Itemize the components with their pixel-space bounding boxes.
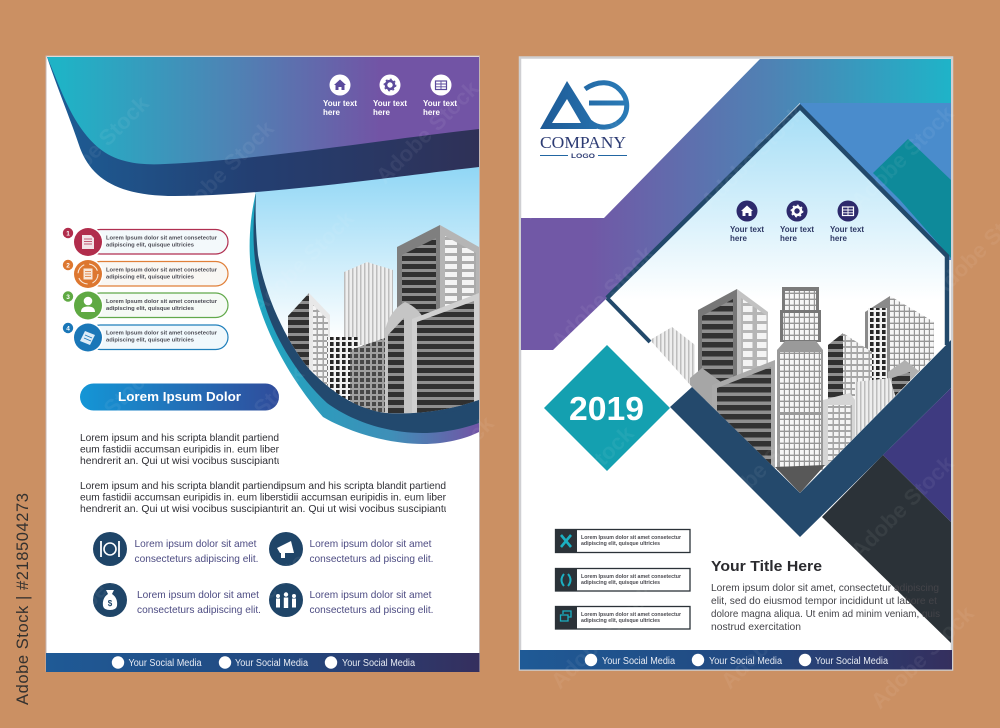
feature: dining: consecteturs adipiscing elit. (134, 554, 258, 565)
item 3: adipiscing elit, quisque ultricies (106, 306, 194, 312)
year diamond (544, 345, 670, 471)
icon: home (330, 74, 350, 96)
watermarks: Adobe Stock (706, 410, 819, 524)
icon: calendar (430, 74, 452, 96)
sky (253, 160, 479, 413)
curved crescent teal (250, 160, 479, 444)
footer bar left: Your Social Media (128, 658, 202, 669)
watermarks: Adobe Stock (866, 600, 979, 714)
icon: gear (380, 74, 400, 96)
watermarks: Adobe Stock (46, 530, 159, 644)
city skyline left (288, 225, 479, 422)
paragraph column 1: Lorem ipsum and his scripta blandit partiend (80, 481, 279, 492)
feature: megaphone (269, 532, 434, 566)
caption 1: here (323, 108, 340, 117)
dark slate shape (822, 455, 951, 643)
geometric cover shapes (521, 59, 951, 643)
blue corner panel (800, 103, 951, 260)
item 4: adipiscing elit, quisque ultricies (106, 338, 194, 344)
paragraph column 2: eum fastidii accumsan euripidis in. eum liber (247, 492, 447, 504)
logo mark reversed E (585, 83, 627, 127)
numbered list (63, 226, 228, 353)
header icons (323, 74, 457, 117)
item 2: adipiscing elit, quisque ultricies (106, 274, 194, 280)
watermarks: Adobe Stock (386, 410, 499, 524)
curved crescent navy (254, 160, 479, 433)
page sheet (46, 56, 480, 671)
box 2: adipiscing elit, quisque ultricies (581, 580, 660, 586)
paragraph column 1: eum fastidii accumsan euripidis in. eum liber (80, 444, 280, 456)
caption 3: Your text (423, 99, 457, 108)
left brochure page (46, 56, 480, 672)
watermarks: Adobe Stock (166, 115, 279, 229)
footer bar right: Your Social Media (602, 656, 675, 667)
box 3: Lorem Ipsum dolor sit amet consetectur (581, 612, 681, 618)
heading button: Lorem Ipsum Dolor (118, 389, 241, 404)
frame lower left (607, 298, 650, 342)
watermarks: Adobe Stock (216, 530, 329, 644)
purple triangle (883, 388, 951, 522)
gradient header (47, 57, 479, 164)
sky and city panel (250, 160, 479, 444)
feature: megaphone: consecteturs ad piscing elit. (310, 554, 434, 565)
body text: Lorem ipsum dolor sit amet, consectetur adipiscing (711, 582, 939, 594)
box 2 (555, 568, 690, 592)
item 1: adipiscing elit, quisque ultricies (106, 242, 194, 248)
item 4: 4 (66, 326, 70, 332)
watermarks: Adobe Stock (546, 240, 659, 354)
footer bar left (46, 653, 480, 672)
caption 3: Your text (830, 225, 864, 234)
box 1: Lorem Ipsum dolor sit amet consetectur (581, 535, 681, 541)
watermarks: Adobe Stock (696, 100, 809, 214)
body text: dolore magna aliqua. Ut enim ad minim veniam, quis (711, 608, 940, 620)
logo tagline: LOGO (571, 154, 595, 160)
item 4: Lorem Ipsum dolor sit amet consetectur (106, 330, 218, 336)
heading button (80, 384, 279, 410)
feature: people (269, 583, 434, 617)
city skyline right (650, 287, 934, 493)
caption 2: Your text (780, 225, 814, 234)
item 3: Lorem Ipsum dolor sit amet consetectur (106, 299, 218, 305)
navy shadow below crescent edge (308, 370, 479, 417)
diamond frame (607, 107, 947, 345)
footer bar right: Your Social Media (815, 656, 888, 667)
body text (711, 582, 940, 633)
caption 1: here (730, 234, 747, 243)
watermarks: Adobe Stock (716, 580, 829, 694)
stock id side label: Adobe Stock | #218504273 (14, 493, 32, 705)
paragraph column 1: hendrerit an. Qui ut wisi vocibus suscipiantur (80, 456, 287, 467)
paragraph column 1: hendrerit an. Qui ut wisi vocibus suscipiantur (80, 504, 287, 515)
feature: people: consecteturs ad piscing elit. (310, 605, 434, 616)
watermarks: Adobe Stock (516, 110, 629, 224)
caption 1: Your text (323, 99, 357, 108)
logo mark triangle (540, 81, 597, 129)
watermarks: Adobe Stock (846, 100, 959, 214)
navy swoosh (47, 57, 479, 196)
box 1 (555, 529, 690, 553)
caption 2: here (373, 108, 390, 117)
item 1 (63, 226, 228, 258)
feature: money bag (93, 583, 261, 617)
footer bar right (520, 650, 952, 670)
watermarks: Adobe Stock (41, 90, 154, 204)
header curved band (47, 57, 479, 196)
box 3: adipiscing elit, quisque ultricies (581, 618, 660, 624)
paragraph column 2: Lorem ipsum and his scripta blandit partiend (247, 481, 446, 492)
item 1: 1 (66, 230, 70, 238)
body text: nostrud exercitation (711, 621, 801, 633)
feature: dining (93, 532, 258, 566)
service boxes (555, 529, 690, 630)
body paragraphs (80, 433, 454, 515)
caption 2: here (780, 234, 797, 243)
purple diagonal band (521, 59, 951, 350)
logo (540, 81, 627, 160)
caption 3: here (830, 234, 847, 243)
paragraph column 1: Lorem ipsum and his scripta blandit partiend (80, 433, 279, 444)
watermarks: Adobe Stock (196, 360, 309, 474)
caption 2: Your text (373, 99, 407, 108)
watermarks: Adobe Stock (46, 360, 159, 474)
item 4 (63, 322, 228, 353)
watermarks: Adobe Stock (371, 75, 484, 189)
feature icons grid (93, 532, 434, 617)
feature: dining: Lorem ipsum dolor sit amet (134, 539, 257, 550)
paragraph column 2: hendrerit an. Qui ut wisi vocibus suscipiantur (247, 504, 454, 515)
caption 1: Your text (730, 225, 764, 234)
watermarks: Adobe Stock (246, 205, 359, 319)
feature: money bag: $ (108, 599, 113, 608)
watermarks: Adobe Stock (546, 580, 659, 694)
paragraph column 2 (279, 482, 446, 514)
box 2: Lorem Ipsum dolor sit amet consetectur (581, 574, 681, 580)
icon: home (736, 200, 758, 222)
company name: COMPANY (540, 133, 626, 152)
caption 3: here (423, 108, 440, 117)
item 1: Lorem Ipsum dolor sit amet consetectur (106, 236, 218, 242)
paragraph column 1: eum fastidii accumsan euripidis in. eum liber (80, 492, 280, 504)
feature: money bag: consecteturs adipiscing elit. (137, 605, 261, 616)
paragraph column 1 (80, 433, 287, 515)
item 2 (63, 258, 228, 290)
right brochure page (520, 58, 952, 670)
teal triangle (873, 139, 951, 258)
watermarks: Adobe Stock (846, 450, 959, 564)
box 1: adipiscing elit, quisque ultricies (581, 541, 660, 547)
icon: calendar (838, 200, 858, 222)
watermarks: Adobe Stock (526, 420, 639, 534)
footer bar left: Your Social Media (342, 658, 415, 669)
feature: megaphone: Lorem ipsum dolor sit amet (310, 539, 432, 550)
footer bar left: Your Social Media (235, 658, 308, 669)
navy chevron (670, 340, 951, 537)
sky diamond (627, 110, 945, 282)
icon: gear (786, 200, 808, 222)
footer bar right: Your Social Media (709, 656, 782, 667)
item 3 (63, 290, 228, 321)
box 3 (555, 606, 690, 630)
item 3: 3 (66, 294, 70, 301)
feature: money bag: Lorem ipsum dolor sit amet (137, 590, 259, 601)
year diamond: 2019 (569, 390, 644, 427)
diamond icons (730, 200, 864, 243)
item 2: Lorem Ipsum dolor sit amet consetectur (106, 268, 218, 274)
item 2: 2 (66, 262, 70, 270)
page sheet (520, 58, 952, 670)
title: Your Title Here (711, 558, 822, 575)
feature: people: Lorem ipsum dolor sit amet (310, 590, 432, 601)
body text: elit, sed do eiusmod tempor incididunt ut labore et (711, 595, 937, 607)
